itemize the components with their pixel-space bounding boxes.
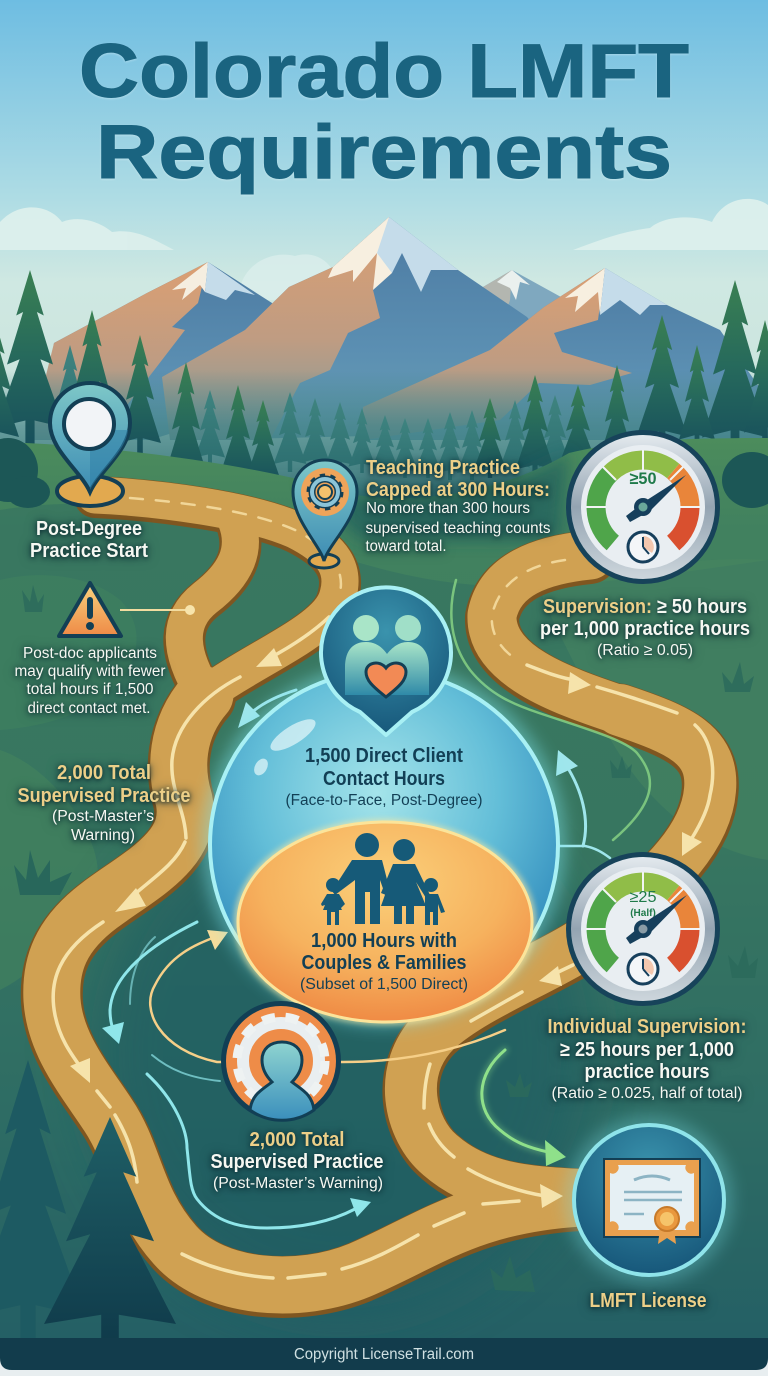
orange arc arrow <box>150 930 505 1062</box>
flow arrows <box>102 580 650 1228</box>
inner orange ellipse: 1,000 hours <box>234 819 536 1025</box>
green arrow to license <box>482 1050 566 1166</box>
distant tree band <box>0 370 768 510</box>
forest <box>0 270 768 487</box>
gear pin <box>293 460 357 568</box>
back right peak <box>470 270 600 340</box>
icon: family <box>321 833 445 925</box>
warning note: Post-doc applicants <box>23 645 157 662</box>
bubble label: 1,500 Direct Client <box>305 745 463 767</box>
license label: LMFT License <box>590 1290 706 1312</box>
ellipse label: (Subset of 1,500 Direct) <box>300 976 468 993</box>
warning note: may qualify with fewer <box>14 663 166 680</box>
teaching cap note: No more than 300 hours <box>366 500 530 517</box>
bottom label: 2,000 total supervised practice: 2,000 Total <box>250 1129 344 1151</box>
copyright: Copyright LicenseTrail.com <box>294 1346 474 1363</box>
teaching cap note: toward total. <box>366 538 446 555</box>
clouds <box>0 199 768 300</box>
bubble highlights <box>251 714 320 778</box>
label: post-degree start: Practice Start <box>30 540 148 562</box>
warning note: total hours if 1,500 <box>26 681 154 698</box>
left peak <box>30 262 340 440</box>
cyan arrow left <box>102 922 220 1081</box>
ellipse label: Couples & Families <box>302 952 466 974</box>
bubble label: (Face-to-Face, Post-Degree) <box>286 792 482 809</box>
main peak <box>162 217 620 440</box>
green thin arc <box>451 580 650 840</box>
start pin <box>50 383 130 506</box>
title: Requirements <box>96 110 672 195</box>
certificate <box>604 1159 700 1244</box>
cyan return arrow <box>556 750 586 846</box>
gauge: 25 hours half: ≥25 <box>629 889 657 906</box>
gauge: 50 hours <box>566 430 720 584</box>
individual supervision label: ≥ 25 hours per 1,000 <box>560 1039 734 1061</box>
supervision label <box>540 596 750 659</box>
gauge: 50 hours: ≥50 <box>630 469 656 488</box>
individual supervision label: Individual Supervision: <box>548 1016 746 1038</box>
grass tufts <box>14 585 758 1292</box>
left label: 2,000 total supervised practice: 2,000 Total <box>57 762 151 784</box>
bubble label: Contact Hours <box>323 768 445 790</box>
meadow shading <box>0 438 768 1340</box>
individual supervision label: (Ratio ≥ 0.025, half of total) <box>552 1085 742 1102</box>
label: post-degree start: Post-Degree <box>36 518 142 540</box>
left label: 2,000 total supervised practice: Warning) <box>71 827 135 844</box>
central bubble: 1,500 direct client contact hours <box>202 663 566 1027</box>
right peak <box>363 268 768 440</box>
warning icon <box>59 583 121 636</box>
footer bar <box>0 1338 768 1370</box>
bottom label: 2,000 total supervised practice: (Post-Master’s Warning) <box>213 1175 383 1192</box>
supervision label: (Ratio ≥ 0.05) <box>597 642 693 659</box>
cyan arrow near pin <box>238 690 296 728</box>
teaching cap note: supervised teaching counts <box>366 520 551 537</box>
road shadow <box>52 497 710 1287</box>
road direction arrows and markings <box>53 617 713 1278</box>
individual supervision label <box>548 1016 746 1102</box>
gauge: 25 hours half: (Half) <box>630 908 656 919</box>
license badge <box>565 1116 733 1284</box>
warning note <box>14 645 166 717</box>
bottom label: 2,000 total supervised practice <box>210 1129 384 1192</box>
warning connector <box>120 605 195 615</box>
supervision label: per 1,000 practice hours <box>540 618 750 640</box>
title: Colorado LMFT <box>79 29 689 114</box>
front foreground pine <box>44 1117 176 1347</box>
road surface <box>52 495 710 1285</box>
bubble label <box>286 745 482 809</box>
road: winding gold path <box>52 495 710 1287</box>
heart couple pin <box>321 587 451 735</box>
bottom label: 2,000 total supervised practice: Supervised Practice <box>210 1151 384 1173</box>
gauge: 25 hours half <box>566 852 720 1006</box>
green meadow <box>0 438 768 1340</box>
left label: 2,000 total supervised practice: (Post-Master’s <box>52 808 154 825</box>
supervision label: Supervision: ≥ 50 hours <box>543 596 747 618</box>
individual supervision label: practice hours <box>584 1061 710 1083</box>
ellipse label <box>300 930 468 993</box>
warning note: direct contact met. <box>28 700 150 717</box>
rear foreground pine <box>0 1060 85 1345</box>
teaching cap note: Teaching Practice <box>366 457 520 479</box>
left label: 2,000 total supervised practice <box>18 762 190 844</box>
teaching cap note: Capped at 300 Hours: <box>366 479 550 501</box>
mountains <box>30 217 768 440</box>
cyan arrow bottom <box>147 1074 371 1228</box>
label: post-degree start <box>30 518 148 562</box>
left label: 2,000 total supervised practice: Supervised Practice <box>18 785 190 807</box>
connector from bubble to gauge <box>558 846 610 858</box>
practice gear avatar <box>221 1001 341 1121</box>
title <box>79 29 689 195</box>
teaching cap note <box>366 457 551 555</box>
sky background <box>0 0 768 470</box>
ellipse label: 1,000 Hours with <box>311 930 457 952</box>
road center lines <box>130 498 565 660</box>
